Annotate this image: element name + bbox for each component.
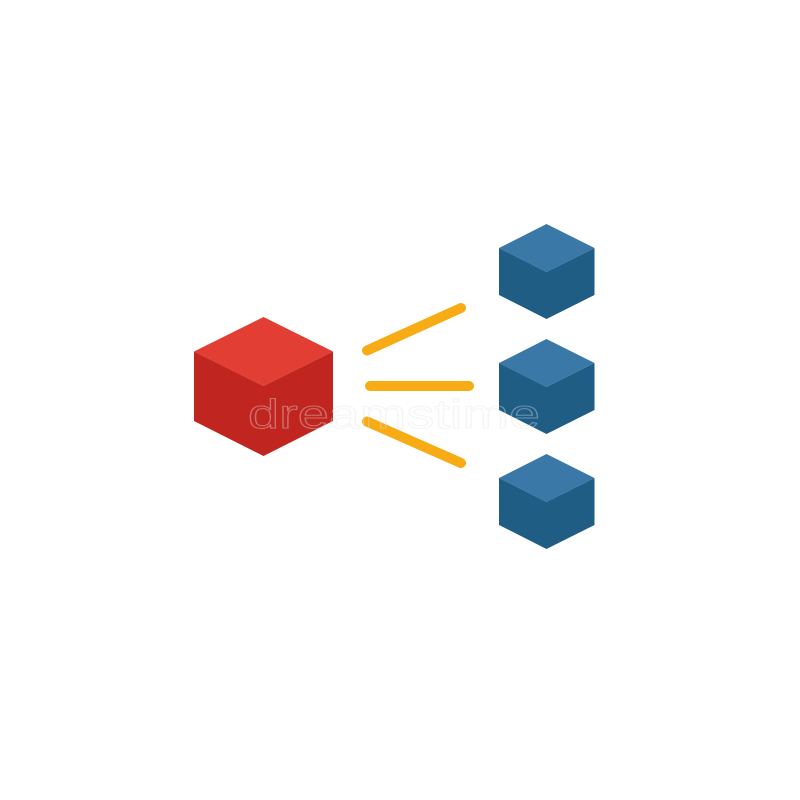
icon: blue cube middle: [499, 339, 594, 434]
icon: red source cube: [194, 317, 333, 456]
arrow: lower yellow connector: [367, 422, 461, 463]
arrow: upper yellow connector: [367, 308, 461, 350]
icon: blue cube bottom: [499, 454, 594, 549]
watermark: dreamstime: [248, 391, 540, 437]
arrow: middle yellow connector: [370, 381, 469, 391]
icon: blue cube top: [499, 224, 594, 319]
